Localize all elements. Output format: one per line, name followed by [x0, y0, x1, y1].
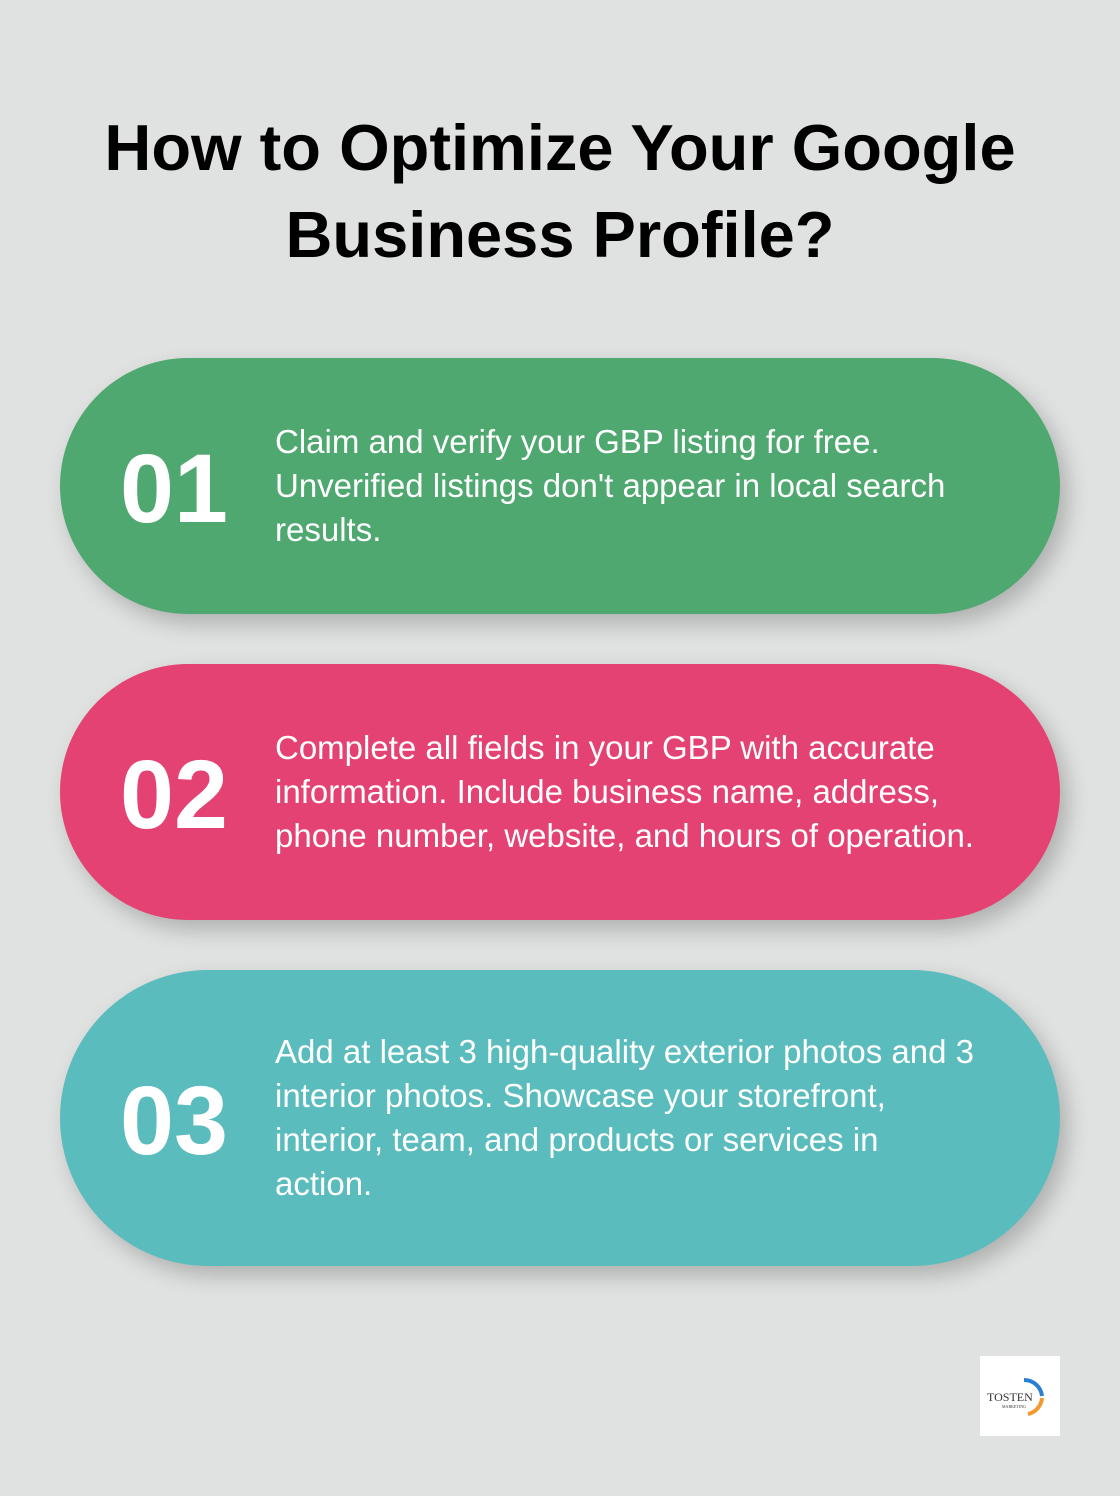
- logo: TOSTEN: [987, 1390, 1033, 1404]
- number 02: 02: [120, 740, 228, 849]
- logo: MARKETING: [1002, 1404, 1026, 1409]
- text 01: [275, 423, 945, 548]
- text 03: [275, 1033, 974, 1202]
- text 01: results.: [275, 511, 381, 548]
- text 01: Unverified listings don't appear in local search: [275, 467, 945, 504]
- title: How to Optimize Your Google: [104, 111, 1016, 184]
- logo: [980, 1356, 1060, 1436]
- text 03: action.: [275, 1165, 372, 1202]
- number 03: 03: [120, 1066, 228, 1175]
- text 02: [275, 729, 974, 854]
- text 01: Claim and verify your GBP listing for free.: [275, 423, 880, 460]
- number 01: 01: [120, 434, 228, 543]
- text 02: information. Include business name, address,: [275, 773, 939, 810]
- text 02: Complete all fields in your GBP with accurate: [275, 729, 935, 766]
- text 03: interior, team, and products or services in: [275, 1121, 878, 1158]
- text 03: Add at least 3 high-quality exterior photos and 3: [275, 1033, 974, 1070]
- title: [104, 111, 1016, 271]
- panel: step 03: [60, 970, 1060, 1266]
- title: Business Profile?: [285, 198, 835, 271]
- panel: step 02: [60, 664, 1060, 920]
- text 02: phone number, website, and hours of operation.: [275, 817, 974, 854]
- text 03: interior photos. Showcase your storefront,: [275, 1077, 886, 1114]
- panel: step 01: [60, 358, 1060, 614]
